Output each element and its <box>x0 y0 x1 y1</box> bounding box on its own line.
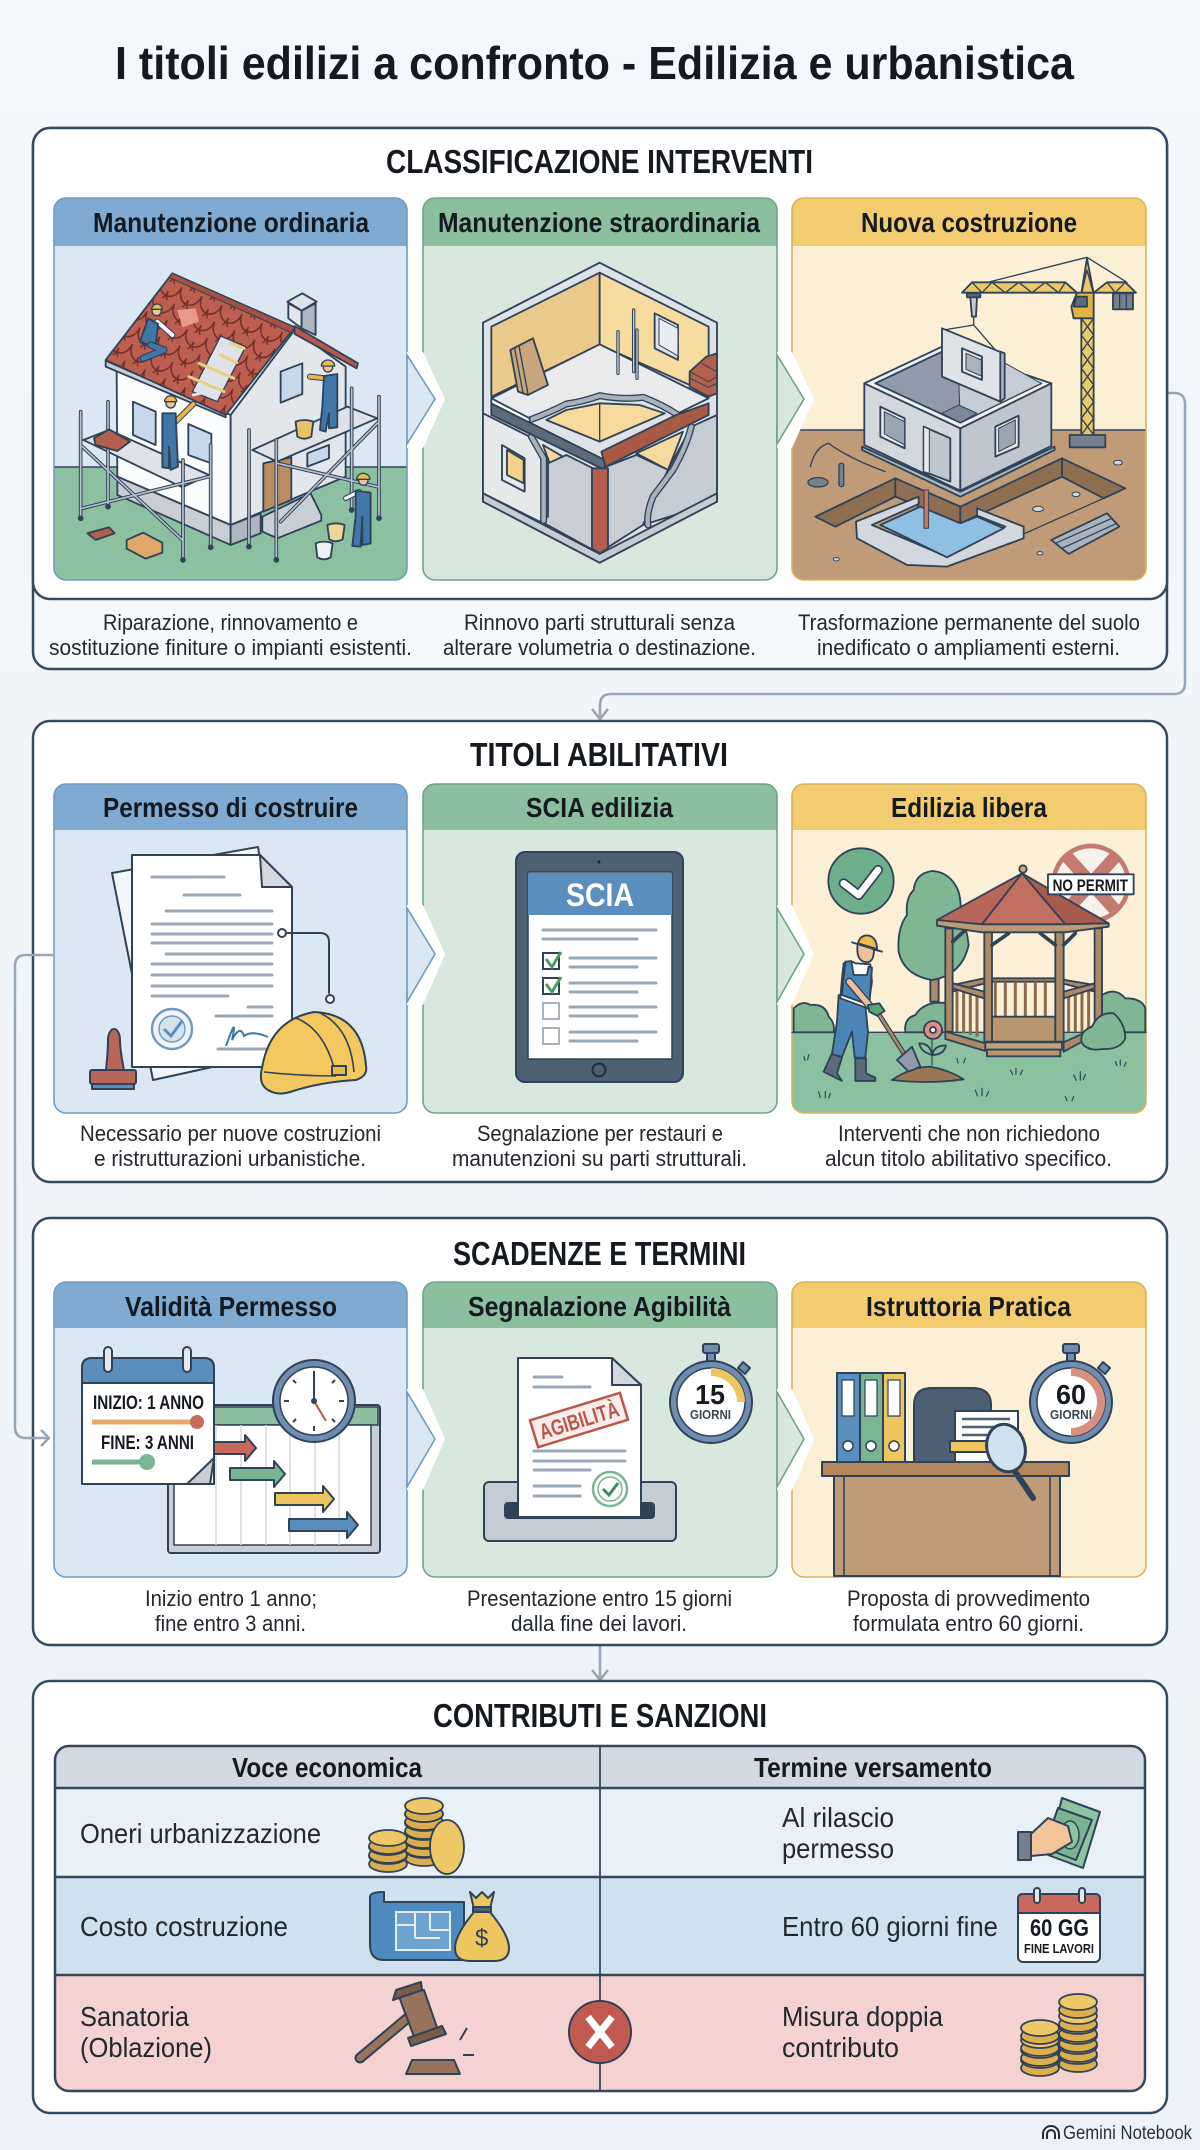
captions: Trasformazione permanente del suolo <box>798 610 1140 635</box>
icon: calendar 60 gg <box>1018 1888 1100 1962</box>
illustration: gazebo, gardener and no permit sign <box>792 846 1146 1101</box>
captions: Interventi che non richiedono <box>838 1121 1100 1146</box>
captions: Proposta di provvedimento <box>847 1586 1090 1611</box>
icon: blueprint and money bag: $ <box>475 1925 488 1952</box>
column header: Termine versamento <box>754 1752 992 1783</box>
panel: classificazione interventi <box>33 128 1167 669</box>
worker on roof <box>140 304 172 358</box>
arrow: chevron green to yellow <box>777 905 814 1005</box>
arrow: chevron green to yellow <box>777 352 814 448</box>
card: istruttoria pratica <box>792 1282 1146 1577</box>
row text: entro 60 giorni fine: Entro 60 giorni fine <box>782 1911 998 1942</box>
illustration: desk, binders, magnifier and stopwatch: GIORNI <box>1050 1407 1092 1422</box>
illustration: gantt window, calendar and clock: FINE: 3 ANNI <box>101 1433 194 1454</box>
illustration: building section <box>483 263 717 563</box>
icon: coin stacks <box>1021 1994 1097 2076</box>
row text: costo costruzione: Costo costruzione <box>80 1911 288 1942</box>
illustration: tablet checklist <box>516 852 683 1082</box>
illustration: gazebo, gardener and no permit sign: NO PERMIT <box>1053 876 1128 895</box>
arrow: from classificazione to titoli <box>592 393 1185 719</box>
row text: al rilascio permesso <box>782 1802 894 1864</box>
captions: Riparazione, rinnovamento e <box>103 610 358 635</box>
illustration: crane and new building <box>808 257 1136 567</box>
illustration: agibilita document, tray and stopwatch: GIORNI <box>690 1407 731 1422</box>
illustration: desk, binders, magnifier and stopwatch: 60 <box>1056 1379 1086 1410</box>
heading: CONTRIBUTI E SANZIONI <box>433 1697 767 1734</box>
captions: Necessario per nuove costruzioni <box>80 1121 381 1146</box>
captions <box>145 1586 1090 1636</box>
illustration: agibilita document, tray and stopwatch: AGIBILITÀ <box>536 1397 622 1444</box>
captions: Presentazione entro 15 giorni <box>467 1586 732 1611</box>
row text: al rilascio permesso: permesso <box>782 1833 894 1864</box>
illustration: tablet checklist: SCIA <box>566 877 634 913</box>
illustration: house with workers <box>81 273 379 560</box>
illustration: gantt window, calendar and clock <box>82 1347 380 1553</box>
table <box>55 1746 1145 2091</box>
heading: SCIA edilizia <box>526 792 673 823</box>
card: manutenzione straordinaria <box>423 198 777 580</box>
icon: coins <box>369 1798 464 1874</box>
icon: calendar 60 gg: 60 GG <box>1030 1915 1089 1942</box>
card: nuova costruzione <box>792 198 1146 580</box>
captions: dalla fine dei lavori. <box>511 1611 687 1636</box>
row text: misura doppia contributo: contributo <box>782 2032 899 2063</box>
arrow: from titoli to scadenze <box>15 955 54 1446</box>
arrow: chevron blue to green <box>407 352 445 448</box>
captions: Segnalazione per restauri e <box>477 1121 723 1146</box>
heading: Istruttoria Pratica <box>866 1291 1071 1322</box>
row text: misura doppia contributo <box>782 2001 943 2063</box>
captions <box>80 1121 1112 1171</box>
worker on right platform <box>310 360 337 432</box>
arrow: chevron green to yellow <box>777 1389 814 1490</box>
illustration: permit document, stamp and helmet <box>90 847 366 1094</box>
card: manutenzione ordinaria <box>54 198 407 580</box>
icon: gavel <box>360 1982 474 2074</box>
icon: hand with money <box>1018 1798 1100 1868</box>
panel: scadenze e termini <box>33 1218 1167 1645</box>
icon: calendar 60 gg: FINE LAVORI <box>1024 1941 1094 1956</box>
panel: titoli abilitativi <box>33 721 1167 1182</box>
captions: e ristrutturazioni urbanistiche. <box>94 1146 366 1171</box>
title: I titoli edilizi a confronto - Edilizia e urbanistica <box>115 37 1074 89</box>
icon: blueprint and money bag <box>370 1892 509 1961</box>
illustration: gantt window, calendar and clock: INIZIO: 1 ANNO <box>93 1393 204 1414</box>
row text: sanatoria oblazione: Sanatoria <box>80 2001 189 2032</box>
heading: Segnalazione Agibilità <box>468 1291 731 1322</box>
worker on ground <box>346 473 371 547</box>
card: validita permesso <box>54 1282 407 1577</box>
captions: manutenzioni su parti strutturali. <box>452 1146 747 1171</box>
icon: red x <box>569 2001 631 2063</box>
card: edilizia libera <box>792 784 1146 1113</box>
card: scia edilizia <box>423 784 777 1113</box>
captions: Rinnovo parti strutturali senza <box>464 610 736 635</box>
row text: sanatoria oblazione <box>80 2001 212 2063</box>
panel: contributi e sanzioni <box>33 1681 1167 2113</box>
arrow: from scadenze to contributi <box>592 1646 608 1680</box>
row text: misura doppia contributo: Misura doppia <box>782 2001 943 2032</box>
arrow: chevron blue to green <box>407 1389 445 1490</box>
worker on left platform <box>162 392 209 470</box>
heading: Manutenzione straordinaria <box>438 207 760 238</box>
arrow: chevron blue to green <box>407 905 445 1005</box>
heading: Permesso di costruire <box>103 792 358 823</box>
illustration: agibilita document, tray and stopwatch: 15 <box>695 1379 725 1410</box>
captions: Inizio entro 1 anno; <box>145 1586 317 1611</box>
column header: Voce economica <box>232 1752 422 1783</box>
heading: SCADENZE E TERMINI <box>453 1235 746 1272</box>
heading: Manutenzione ordinaria <box>93 207 369 238</box>
captions: alcun titolo abilitativo specifico. <box>825 1146 1112 1171</box>
heading: Edilizia libera <box>891 792 1047 823</box>
row text: oneri urbanizzazione: Oneri urbanizzazione <box>80 1818 321 1849</box>
captions: inedificato o ampliamenti esterni. <box>817 635 1120 660</box>
captions <box>49 610 1140 660</box>
captions: alterare volumetria o destinazione. <box>443 635 756 660</box>
captions: sostituzione finiture o impianti esistenti. <box>49 635 412 660</box>
heading: TITOLI ABILITATIVI <box>470 736 728 773</box>
illustration: agibilita document, tray and stopwatch <box>484 1344 752 1541</box>
row text: al rilascio permesso: Al rilascio <box>782 1802 894 1833</box>
card: permesso di costruire <box>54 784 407 1113</box>
row text: sanatoria oblazione: (Oblazione) <box>80 2032 212 2063</box>
illustration: desk, binders, magnifier and stopwatch <box>822 1344 1112 1576</box>
captions: fine entro 3 anni. <box>155 1611 306 1636</box>
captions: formulata entro 60 giorni. <box>853 1611 1084 1636</box>
heading: Validità Permesso <box>125 1291 337 1322</box>
heading: Nuova costruzione <box>861 207 1077 238</box>
card: segnalazione agibilita <box>423 1282 777 1577</box>
heading: CLASSIFICAZIONE INTERVENTI <box>386 143 813 180</box>
